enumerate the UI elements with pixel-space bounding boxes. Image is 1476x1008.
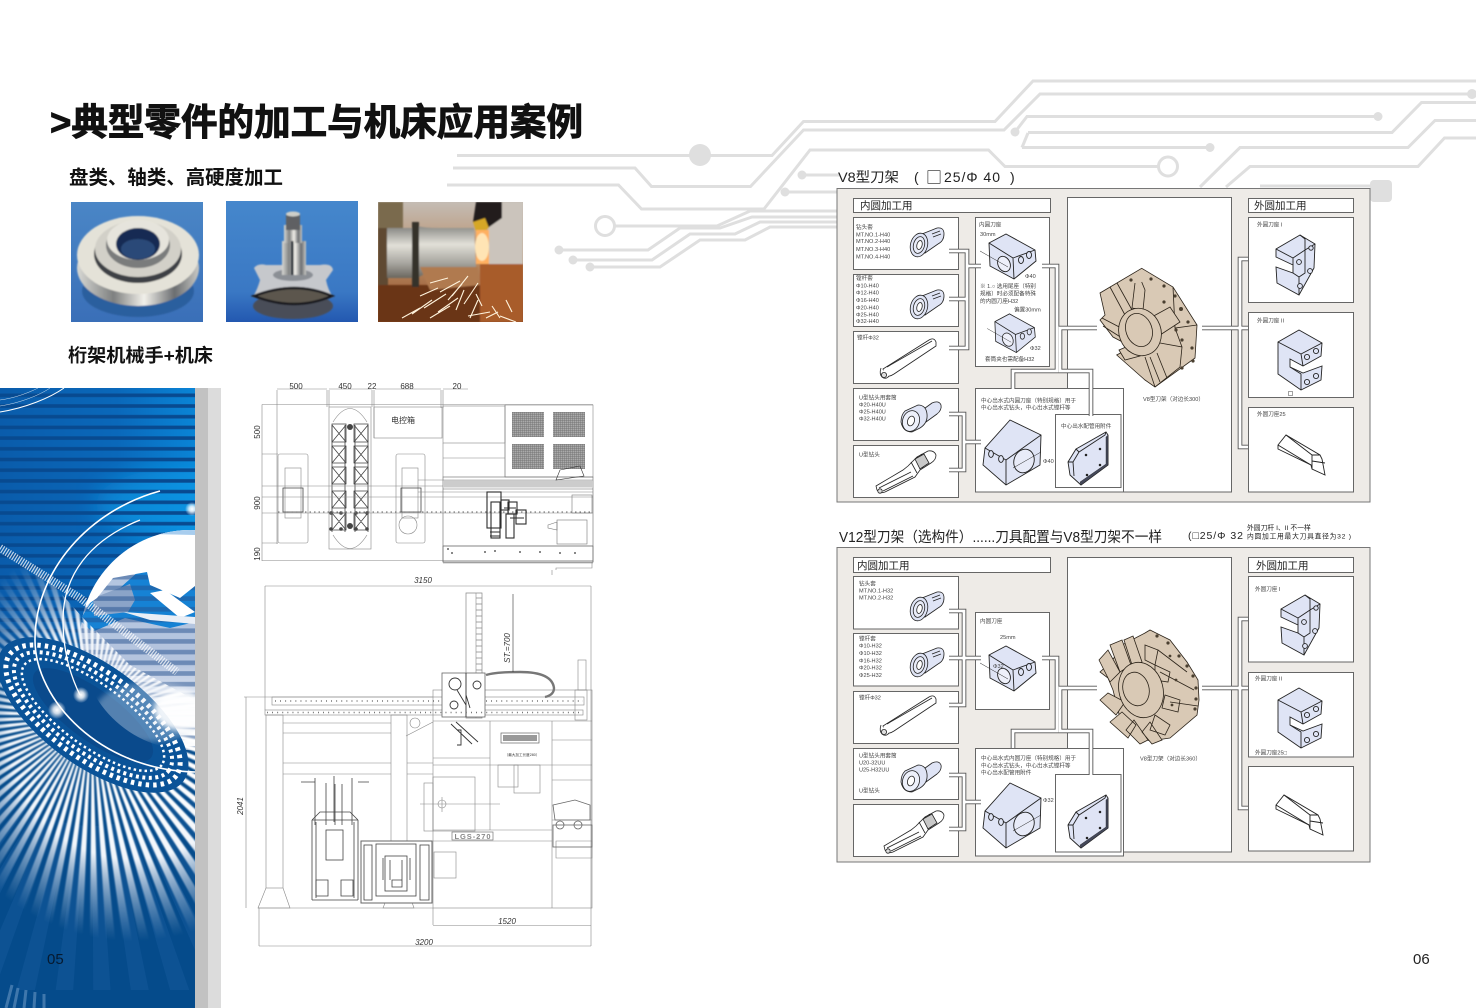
heading: V12 turret: 内圆加工用最大刀具直径为32 ) bbox=[1247, 532, 1351, 540]
tool box: center coolant holder: 中心出水式内圆刀座（特别规格）用于 bbox=[981, 396, 1077, 404]
tool box: drill sleeve: 钻头套 bbox=[856, 223, 873, 231]
caption: V8 turret: V8型刀架（对边长300） bbox=[1143, 395, 1204, 403]
dimension labels: ST.=700 bbox=[503, 633, 512, 663]
tool box: boring sleeve: Φ20-H40 bbox=[856, 306, 879, 312]
tool box: outer tool 25: 外圆刀座25 bbox=[1257, 410, 1286, 418]
header: outer machining: 外圆加工用 bbox=[1256, 560, 1308, 572]
header: outer machining bbox=[1248, 198, 1354, 212]
tool box: outer holder II bbox=[1248, 312, 1354, 398]
heading: V8 turret: ) bbox=[1010, 169, 1015, 185]
tool box: boring sleeve: Φ16-H40 bbox=[856, 298, 879, 304]
tool box: boring sleeve: Φ20-H32 bbox=[859, 666, 882, 672]
tool box: U-drill sleeve bbox=[854, 388, 958, 440]
page number: 05: 05 bbox=[47, 951, 64, 968]
heading: V8 turret: □ bbox=[926, 164, 942, 188]
photo: turning with sparks bbox=[378, 202, 523, 322]
tool box: boring sleeve: Φ10-H32 bbox=[859, 651, 882, 657]
tool box: outer tool 25 bbox=[1248, 408, 1354, 492]
title: >典型零件的加工与机床应用案例 bbox=[50, 102, 583, 143]
tool box: boring sleeve: Φ32-H40 bbox=[856, 319, 879, 325]
tool box: outer holder II: 外圆刀座 II bbox=[1257, 316, 1284, 324]
tool box: boring sleeve: Φ25-H32 bbox=[859, 673, 882, 679]
tool box: outer holder I bbox=[1248, 576, 1354, 662]
dimension labels: 2041 bbox=[236, 797, 245, 816]
chart: side view layout drawing: （最大加工长度280） bbox=[505, 752, 539, 757]
tool box: drill sleeve bbox=[854, 218, 958, 270]
tool box: boring sleeve: 镗杆套 bbox=[856, 274, 873, 282]
heading: V12 turret bbox=[839, 523, 1351, 546]
tool box: coolant accessory: 中心出水配管用附件 bbox=[1061, 422, 1112, 430]
tool box: inner holder: 内圆刀座 bbox=[980, 617, 1003, 625]
panel: center white area bbox=[1068, 198, 1232, 492]
dimension labels: 190 bbox=[253, 547, 262, 561]
tool box: inner holder: 规格）时必须配备特殊 bbox=[980, 290, 1036, 298]
tool box: center coolant holder bbox=[976, 748, 1124, 856]
tool box: inner holder bbox=[976, 612, 1050, 710]
tool box: drill sleeve: MT.NO.4-H40 bbox=[856, 254, 890, 260]
secondary faint rays bbox=[0, 511, 297, 921]
globe bbox=[80, 530, 195, 750]
tool box: inner holder: 30mm bbox=[980, 232, 996, 238]
decorative strip: gray bars bbox=[195, 388, 221, 1008]
connector lines bbox=[949, 611, 1257, 829]
tool box: coolant accessory bbox=[1056, 774, 1121, 852]
header: inner machining: 内圆加工用 bbox=[860, 199, 912, 212]
photo: shaft part bbox=[226, 201, 358, 322]
arcs bbox=[0, 388, 195, 772]
dimension labels bbox=[253, 382, 462, 561]
tool box: inner holder: 内圆刀座 bbox=[979, 220, 1002, 228]
tool box: outer holder I: 外圆刀座 I bbox=[1255, 585, 1281, 593]
tool box: U-drill bbox=[854, 446, 958, 498]
dimension labels: 450 bbox=[338, 382, 352, 391]
tool box: center coolant holder: 中心出水式钻头，中心出水式镗杆等 bbox=[981, 404, 1071, 412]
tool box: U-drill sleeve: Φ32-H40U bbox=[859, 416, 886, 422]
decorative strip: blue globe artwork bbox=[0, 388, 195, 1008]
panel: V12 turret tools bbox=[837, 548, 1370, 862]
radial rays bbox=[0, 566, 242, 866]
dimension labels: 20 bbox=[453, 382, 462, 391]
tool box: boring bar bbox=[854, 692, 958, 744]
tool box: U-drill sleeve: U型钻头 bbox=[859, 786, 880, 794]
page number: 06: 06 bbox=[1413, 951, 1430, 968]
tool box: drill sleeve: MT.NO.3-H40 bbox=[856, 247, 890, 253]
dimension labels: 500 bbox=[289, 382, 303, 391]
header: outer machining: 外圆加工用 bbox=[1254, 200, 1306, 212]
tool box: outer holder II bbox=[1248, 672, 1354, 757]
tool box: inner holder: Φ40 bbox=[1025, 274, 1036, 280]
tool box: outer holder II: 外圆刀座 II bbox=[1255, 674, 1282, 682]
dimension labels: 22 bbox=[368, 382, 377, 391]
background: circuit board lines bbox=[447, 81, 1476, 272]
tool box: U-drill sleeve: Φ20-H40U bbox=[859, 402, 886, 408]
tool box: center coolant holder: 中心出水配管用附件 bbox=[981, 768, 1032, 776]
tool box: boring sleeve: Φ16-H32 bbox=[859, 658, 882, 664]
tool box: center coolant holder bbox=[976, 388, 1124, 492]
tool box: outer holder I bbox=[1248, 218, 1354, 302]
heading: V8 turret: 25/Φ 40 bbox=[944, 169, 1000, 185]
tool box: U-drill sleeve: U20-32UU bbox=[859, 760, 885, 766]
turret: V12 bbox=[1099, 630, 1199, 744]
tool box: boring sleeve: 镗杆套 bbox=[859, 634, 876, 642]
tool box: drill sleeve: MT.NO.1-H40 bbox=[856, 232, 890, 238]
tool box: boring bar: 镗杆Φ32 bbox=[859, 694, 881, 702]
header: outer machining bbox=[1248, 558, 1354, 572]
tool box: U-drill bbox=[854, 804, 958, 856]
tool box: drill sleeve: MT.NO.1-H32 bbox=[859, 588, 893, 594]
tool box: drill sleeve bbox=[854, 576, 958, 629]
tool box: boring sleeve: Φ12-H40 bbox=[856, 290, 879, 296]
heading: gantry robot: 桁架机械手+机床 bbox=[68, 345, 214, 366]
tool box: center coolant holder: 中心出水式内圆刀座（特别规格）用于 bbox=[981, 754, 1077, 762]
header: inner machining bbox=[854, 198, 1050, 212]
heading: V8 turret: ( bbox=[914, 169, 919, 185]
tool box: inner holder: 套筒夹也需配备H32 bbox=[985, 355, 1034, 363]
tool box: center coolant holder: 中心出水式钻头，中心出水式镗杆等 bbox=[981, 762, 1071, 770]
tool box: U-drill: U型钻头 bbox=[859, 450, 880, 458]
chart: top view layout drawing bbox=[253, 382, 593, 575]
heading: V12 turret: (□25/Φ 32 bbox=[1188, 530, 1243, 542]
tool box: outer holder I: 外圆刀座 I bbox=[1257, 220, 1283, 228]
chart: side view layout drawing bbox=[236, 576, 592, 947]
globe overlay on hub bbox=[95, 682, 206, 742]
tool box: outer holder II: 外圆刀座25□ bbox=[1255, 748, 1288, 756]
tool box: center coolant holder: Φ40 bbox=[1043, 459, 1054, 465]
tool box: inner holder: ※ 1.○ 选用尾座（特别 bbox=[980, 282, 1036, 290]
header: inner machining: 内圆加工用 bbox=[857, 559, 910, 572]
dimension labels bbox=[236, 576, 516, 947]
tool box: center coolant holder: Φ32 bbox=[1043, 798, 1054, 804]
dimension labels: 3150 bbox=[414, 576, 432, 585]
tool box: drill sleeve: MT.NO.2-H32 bbox=[859, 596, 893, 602]
heading: part machining: 盘类、轴类、高硬度加工 bbox=[69, 166, 283, 189]
heading: V12 turret: 外圆刀杆 I、II 不一样 bbox=[1247, 523, 1311, 532]
tool box: U-drill sleeve: Φ25-H40U bbox=[859, 410, 886, 416]
tool box: inner holder: 的内圆刀座H32 bbox=[980, 297, 1018, 305]
tool box: inner holder: Φ32 bbox=[993, 664, 1004, 670]
dimension labels: 3200 bbox=[415, 938, 433, 947]
tool box: boring sleeve bbox=[854, 634, 958, 686]
dimension labels: 电控箱 bbox=[391, 415, 415, 425]
heading: V12 turret: V12型刀架（选构件）......刀具配置与V8型刀架不一样 bbox=[839, 529, 1162, 546]
tool box: inner holder: Φ32 bbox=[1030, 346, 1041, 352]
dimension labels: 900 bbox=[253, 496, 262, 510]
photo: disc part bbox=[71, 202, 203, 322]
tool box: inner holder: 25mm bbox=[1000, 635, 1016, 641]
tool box: drill sleeve: 钻头套 bbox=[859, 580, 876, 588]
caption: V12 turret: V8型刀架（对边长360） bbox=[1140, 754, 1201, 762]
dimension labels: 1520 bbox=[498, 917, 516, 926]
tool box: boring sleeve: Φ10-H40 bbox=[856, 284, 879, 290]
panel: V8 turret tools bbox=[837, 188, 1370, 502]
tool box: inner holder: 偏置30mm bbox=[1014, 306, 1041, 314]
hub rings bbox=[0, 637, 188, 793]
chart: side view layout drawing: LGS-270 bbox=[454, 832, 490, 841]
tool box: U-drill sleeve: U25-H32UU bbox=[859, 768, 889, 774]
header: inner machining bbox=[854, 558, 1050, 572]
tool box: boring bar bbox=[854, 332, 958, 384]
dimension labels: 500 bbox=[253, 425, 262, 439]
tool box: U-drill sleeve: U型钻头用套筒 bbox=[859, 752, 897, 760]
panel: center white area bbox=[1068, 558, 1232, 852]
tool box: coolant accessory bbox=[1056, 414, 1121, 488]
heading: V8 turret bbox=[838, 164, 1015, 188]
tool box: outer tool 25 bbox=[1248, 766, 1354, 851]
turret: V8 bbox=[1100, 268, 1197, 387]
tool box: U-drill sleeve: U型钻头用套筒 bbox=[859, 394, 897, 402]
tool box: boring bar: 镗杆Φ32 bbox=[857, 334, 879, 342]
connector lines bbox=[949, 251, 1257, 470]
tool box: U-drill sleeve bbox=[854, 748, 958, 800]
tool box: boring sleeve: Φ25-H40 bbox=[856, 312, 879, 318]
tool box: boring sleeve: Φ10-H32 bbox=[859, 644, 882, 650]
dimension labels: 688 bbox=[400, 382, 414, 391]
tool box: boring sleeve bbox=[854, 274, 958, 326]
tool box: drill sleeve: MT.NO.2-H40 bbox=[856, 239, 890, 245]
tool box: inner holder bbox=[976, 218, 1050, 366]
heading: V8 turret: V8型刀架 bbox=[838, 169, 899, 185]
